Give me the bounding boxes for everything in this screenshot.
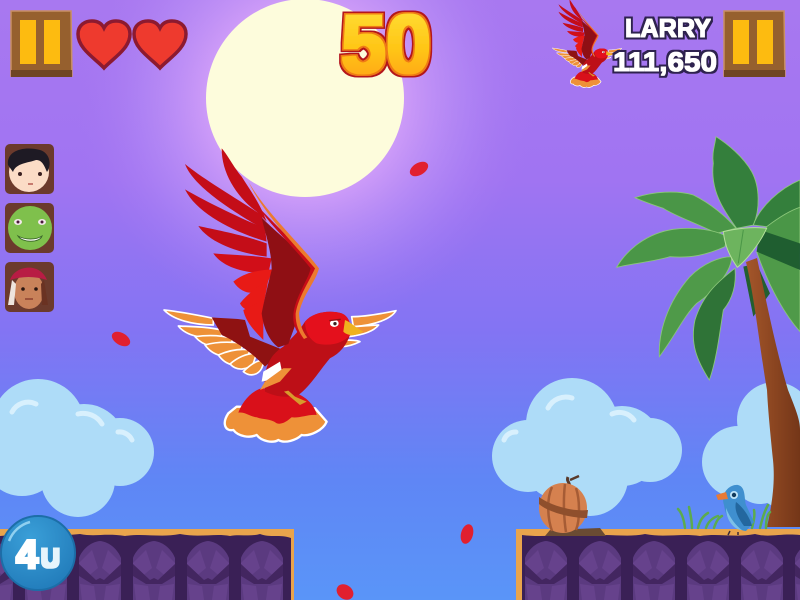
- avatar: pirate: [5, 262, 54, 312]
- 4U badge: 4: [16, 533, 39, 577]
- small blue bird: [716, 485, 754, 535]
- pause button: right: [724, 11, 785, 77]
- trunk: [746, 258, 800, 527]
- heart 2: [134, 21, 186, 68]
- left cloud: [0, 379, 154, 517]
- small opponent bird: [552, 0, 622, 88]
- crown leaf: [723, 228, 767, 267]
- middle-right cloud: [492, 378, 682, 516]
- avatar: boy: [5, 144, 54, 194]
- falling feathers: [109, 159, 475, 600]
- grass: [678, 505, 770, 528]
- acorn nut: [539, 476, 606, 536]
- far-right cloud: [702, 382, 800, 510]
- 4U badge: U: [41, 543, 60, 573]
- main red bird: [164, 148, 396, 442]
- right platform: [516, 529, 800, 600]
- left platform: [0, 529, 294, 600]
- pause button: left: [11, 11, 72, 77]
- 4U badge: [1, 516, 75, 590]
- sun glow: [0, 0, 800, 340]
- fronds: [617, 137, 800, 380]
- sun: [206, 0, 404, 197]
- avatar: green monster: [5, 203, 54, 253]
- heart 1: [78, 21, 130, 68]
- palm tree: [617, 137, 800, 527]
- score: 50: [341, 0, 431, 90]
- opponent name: LARRY: [625, 13, 711, 43]
- hearts: [78, 21, 186, 68]
- opponent score: 111,650: [613, 47, 717, 77]
